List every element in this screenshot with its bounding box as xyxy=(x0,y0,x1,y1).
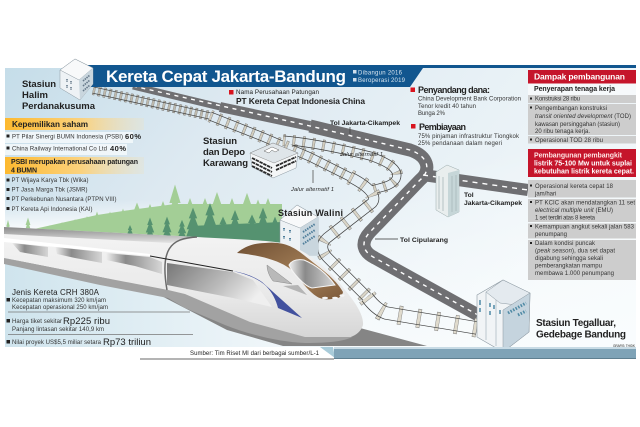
source line: Sumber: Tim Riset MI dari berbagai sumber/L-1 xyxy=(190,351,320,357)
panel: operasional kereta: (peak season), dua set dapat xyxy=(535,248,615,254)
panel: train specifications: Rp73 triliun xyxy=(103,337,151,348)
panel: operasional kereta: PT KCIC akan mendatangkan 11 set xyxy=(535,200,635,206)
panel: operasional kereta: digabung sehingga sekali xyxy=(535,256,603,262)
panel: Dampak pembangunan: kawasan persinggahan (stasiun) xyxy=(535,122,620,128)
panel: Dampak pembangunan: transit oriented development (TOD) xyxy=(535,114,631,120)
panel: train specifications: Kecepatan maksimum 320 km/jam xyxy=(12,298,106,304)
label: Stasiun Tegalluar, Gedebage Bandung: Stasiun Tegalluar, xyxy=(536,318,616,329)
panel: operasional kereta: penumpang xyxy=(535,232,567,238)
panel: operasional kereta: Operasional kereta cepat 18 xyxy=(535,184,614,190)
illustration: high-speed train xyxy=(4,227,427,346)
label: Stasiun dan Depo Karawang: Stasiun xyxy=(203,136,237,147)
panel: Pembangunan pembangkit listrik: Pembangunan pembangkit xyxy=(534,152,623,160)
panel: PSBI merupakan perusahaan patungan xyxy=(5,157,144,213)
icon: Tegalluar station building xyxy=(477,280,530,352)
panel: Dampak pembangunan: Konstruksi 28 ribu xyxy=(535,96,580,102)
label: Jalur alternatif lower with leader: Jalur alternatif 1 xyxy=(290,187,334,193)
panel: Penyandang dana: Tenor kredit 40 tahun xyxy=(418,104,476,110)
panel: PSBI merupakan perusahaan patungan: 4 BUMN xyxy=(11,168,37,174)
panel: operasional kereta: pemberangkatan mampu xyxy=(535,264,602,270)
label: Stasiun dan Depo Karawang: Karawang xyxy=(203,158,248,169)
panel: Pembangunan pembangkit listrik: kebutuhan listrik kereta cepat. xyxy=(534,168,634,176)
panel: Kepemilikan saham: PT Pilar Sinergi BUMN Indonesia (PSBI) xyxy=(12,134,123,140)
side window xyxy=(267,265,292,284)
panel: Pembiayaan: 25% pendanaan dalam negeri xyxy=(418,141,502,147)
panel: Dampak pembangunan: Pengembangan konstruksi xyxy=(535,106,607,112)
train shadow xyxy=(5,258,427,346)
label: Tol Cipularang with leader: Tol Cipularang xyxy=(400,237,448,244)
panel: Kepemilikan saham: Kepemilikan saham xyxy=(12,120,88,129)
label: Stasiun Halim Perdanakusuma: Perdanakusuma xyxy=(22,101,96,112)
cockpit xyxy=(237,243,343,299)
road: Tol Jakarta-Cikampek and Tol Cipularang xyxy=(133,86,528,315)
panel: Kepemilikan saham: 40% xyxy=(110,144,126,153)
headlights xyxy=(322,294,344,299)
panel: train specifications: Jenis Kereta CRH 380A xyxy=(12,288,100,297)
dark waistline xyxy=(150,256,233,271)
panel: operasional kereta: Kemampuan angkut sekali jalan 583 xyxy=(535,224,635,230)
panel: Kepemilikan saham: China Railway International Co Ltd xyxy=(12,146,107,152)
label: Stasiun Halim Perdanakusuma: Halim xyxy=(22,90,48,101)
background panel xyxy=(5,68,636,347)
icon: Jakarta-Cikampek toll building xyxy=(436,165,459,217)
roof band xyxy=(4,227,197,243)
label: Nama Perusahaan Patungan: Nama Perusahaan Patungan xyxy=(236,89,319,96)
panel: operasional kereta: electrical multiple unit (EMU) xyxy=(535,208,613,214)
large side recess xyxy=(167,263,272,307)
panel: Dampak pembangunan: Operasional TOD 28 ribu xyxy=(535,138,603,144)
label: Jalur alternatif upper: Jalur alternatif 1 xyxy=(339,152,383,158)
panel: Kepemilikan saham: 60% xyxy=(125,132,141,141)
panel: train specifications: Nilai proyek US$5,5 miliar setara xyxy=(12,340,102,346)
panel: train specifications: Panjang lintasan sekitar 140,9 km xyxy=(12,327,104,333)
panel: PSBI merupakan perusahaan patungan: PT Perkebunan Nusantara (PTPN VIII) xyxy=(12,197,116,203)
icon: Walini station building xyxy=(280,205,318,255)
title banner: Beroperasi 2019 xyxy=(358,78,406,84)
train body xyxy=(4,227,363,341)
panel: Dampak pembangunan: Penyerapan tenaga kerja xyxy=(534,86,615,93)
panel: PSBI merupakan perusahaan patungan: PT Jasa Marga Tbk (JSMR) xyxy=(12,188,88,194)
label: Stasiun dan Depo Karawang: dan Depo xyxy=(203,147,245,158)
panel: operasional kereta: 1 set terdiri atas 8 kereta xyxy=(535,216,596,222)
panel: Pembiayaan: Pembiayaan xyxy=(419,122,466,132)
white stripe xyxy=(4,238,150,256)
panel: train specifications: Harga tiket sekitar xyxy=(12,319,62,325)
door arch xyxy=(165,237,197,290)
panel: operasional kereta: jam/hari xyxy=(534,192,556,198)
panel: PSBI merupakan perusahaan patungan: PSBI merupakan perusahaan patungan xyxy=(11,159,138,166)
panel: Penyandang dana: Penyandang dana: xyxy=(418,85,490,95)
lower skirt xyxy=(4,258,352,343)
panel: Pembiayaan: 75% pinjaman infrastruktur Tiongkok xyxy=(418,134,520,140)
title banner xyxy=(88,65,636,87)
label: Tol Jakarta-Cikampek with leader xyxy=(330,120,400,134)
label: Stasiun Tegalluar, Gedebage Bandung: Gedebage Bandung xyxy=(536,330,626,340)
panel: Penyandang dana: Bunga 2% xyxy=(418,111,446,117)
windscreen xyxy=(289,260,335,288)
panel: Kepemilikan saham xyxy=(5,118,144,155)
label: Nama Perusahaan Patungan: PT Kereta Cepat Indonesia China xyxy=(236,96,365,106)
label: Stasiun Tegalluar, Gedebage Bandung xyxy=(536,318,626,340)
icon: Karawang depot building xyxy=(250,143,298,178)
panel: Pembiayaan xyxy=(411,122,520,147)
panel: Penyandang dana xyxy=(410,85,521,117)
panel: train specifications: Kecepatan operasional 250 km/jam xyxy=(12,305,108,311)
label: Tol Jakarta-Cikampek east: Tol xyxy=(464,192,474,199)
blue stripe xyxy=(233,271,302,318)
panel: operasional kereta xyxy=(528,180,636,280)
credit: GRAFIS: TH/DK xyxy=(613,344,636,348)
panel: Pembangunan pembangkit listrik xyxy=(528,149,636,177)
label: Stasiun dan Depo Karawang xyxy=(203,136,248,169)
panel: PSBI merupakan perusahaan patungan: PT Wijaya Karya Tbk (Wika) xyxy=(12,178,88,184)
label: Tol Jakarta-Cikampek east: Jakarta-Cikampek xyxy=(464,200,522,207)
railway track: rails xyxy=(93,90,477,328)
lower panel xyxy=(283,285,307,295)
railway track: ties xyxy=(93,90,477,328)
panel: PSBI merupakan perusahaan patungan: PT Kereta Api Indonesia (KAI) xyxy=(12,207,92,213)
title banner: Dibangun 2016 xyxy=(358,70,403,76)
label: Stasiun Halim Perdanakusuma xyxy=(22,79,96,112)
label: Tol Jakarta-Cikampek with leader: Tol Jakarta-Cikampek xyxy=(330,120,400,127)
panel: operasional kereta: membawa 1.000 penumpang xyxy=(535,271,614,277)
panel: operasional kereta: Dalam kondisi puncak xyxy=(535,241,596,247)
side recesses xyxy=(12,243,48,257)
panel: Dampak pembangunan: 20 ribu tenaga kerja. xyxy=(535,129,590,135)
icon: Halim station building xyxy=(60,59,93,100)
panel: Penyandang dana: China Development Bank Corporation xyxy=(418,96,521,102)
label: Tol Cipularang with leader xyxy=(375,237,448,244)
label: Stasiun Walini: Stasiun Walini xyxy=(278,208,343,218)
panel: train specifications xyxy=(6,288,193,348)
base strip xyxy=(0,347,636,359)
label: Jalur alternatif lower with leader xyxy=(290,170,334,193)
panel: Dampak pembangunan xyxy=(528,70,636,144)
panel: train specifications: Rp225 ribu xyxy=(63,316,110,327)
panel: Pembangunan pembangkit listrik: listrik 75-100 Mw untuk suplai xyxy=(534,160,632,168)
title text: Kereta Cepat Jakarta-Bandung xyxy=(106,67,346,86)
panel: Dampak pembangunan: Dampak pembangunan xyxy=(534,72,625,82)
label: Nama Perusahaan Patungan xyxy=(229,89,365,106)
label: Stasiun Halim Perdanakusuma: Stasiun xyxy=(22,79,56,90)
label: Tol Jakarta-Cikampek east xyxy=(464,192,522,207)
illustration: pine forest xyxy=(4,184,282,246)
